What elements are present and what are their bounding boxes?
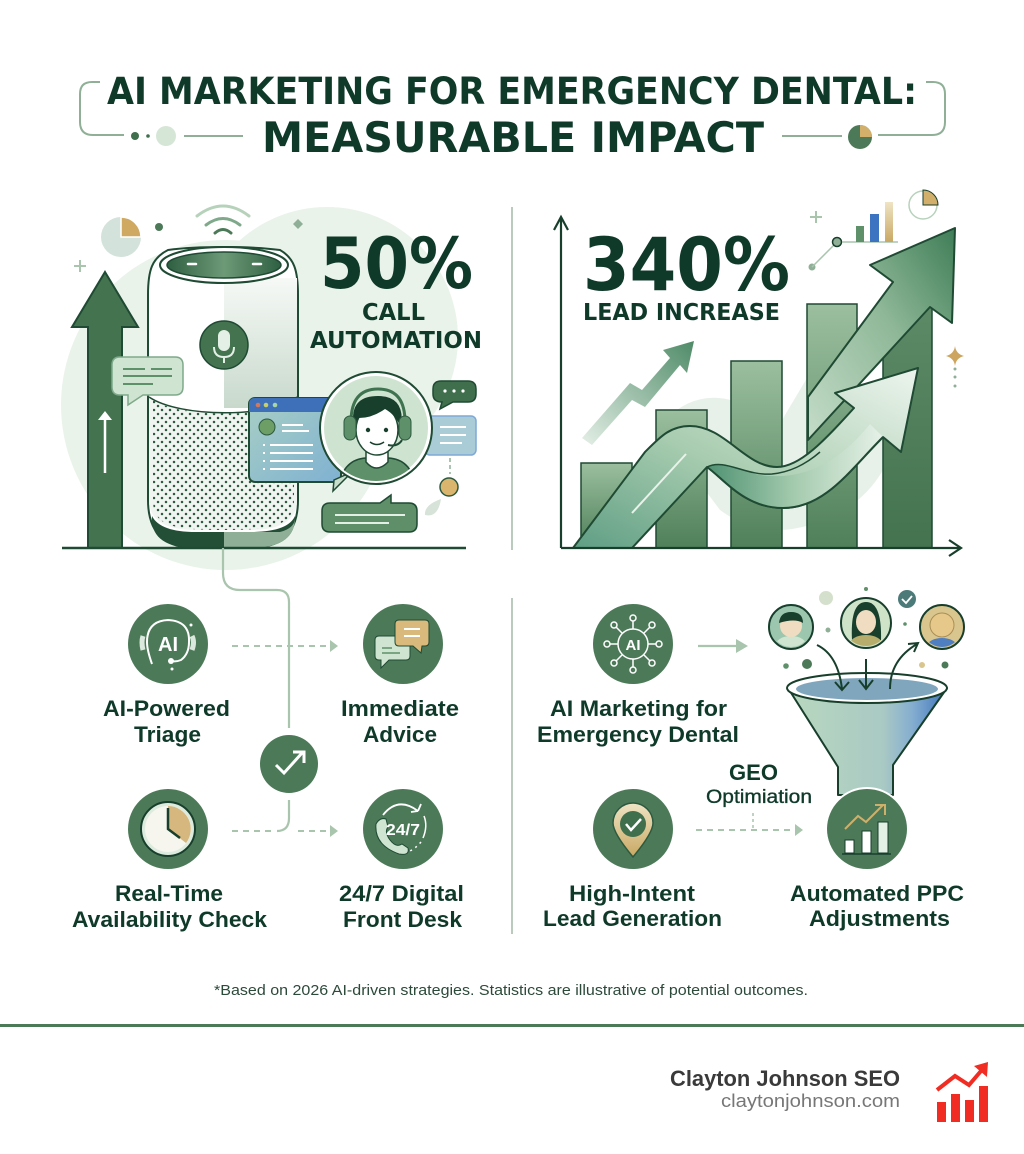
- label: Real-Time Availability Check: Real-Time: [115, 881, 223, 906]
- label: High-Intent Lead Generation: Lead Generation: [543, 906, 722, 931]
- panel: lead increase chart: [554, 190, 964, 556]
- label: AI Marketing for Emergency Dental: AI Marketing for: [550, 696, 727, 721]
- decorative plus: [810, 211, 822, 223]
- speech bubble: dark with dots: [433, 381, 476, 409]
- icon: 24/7 phone: [363, 789, 443, 869]
- vertical divider bottom: [511, 598, 513, 934]
- connector line: [223, 548, 289, 831]
- icon: clock: [128, 789, 208, 869]
- icon: red growth logo: [937, 1062, 988, 1122]
- avatar: smiling person: [920, 605, 964, 650]
- big stat: 50% call automation: AUTOMATION: [310, 328, 482, 354]
- background blob: [61, 207, 458, 570]
- vertical divider top: [511, 207, 513, 550]
- avatar: woman: [841, 598, 891, 650]
- decorative plus: [74, 260, 86, 272]
- footnote: *Based on 2026 AI-driven strategies. Statistics are illustrative of potential outcomes.: [214, 982, 808, 999]
- avatar: boy: [769, 605, 813, 650]
- agent portrait: [320, 372, 432, 491]
- sparkle and dots: [946, 346, 964, 388]
- label: GEO Optimiation: Optimiation: [706, 787, 812, 808]
- big stat: 340% lead increase: 340%: [583, 223, 790, 308]
- label: Immediate Advice: Advice: [363, 722, 437, 747]
- label: Immediate Advice: Immediate: [341, 696, 459, 721]
- dashed arrow with GEO link: [696, 813, 803, 836]
- big stat: 50% call automation: [310, 223, 482, 354]
- icon: location pin: [593, 789, 673, 869]
- footer rule: [0, 1024, 1024, 1027]
- speech bubble: green: [112, 357, 183, 405]
- decorative dots and check badge: [783, 587, 948, 669]
- curved S arrow: [573, 368, 918, 548]
- label: Immediate Advice: [341, 696, 459, 747]
- label: Automated PPC Adjustments: Adjustments: [809, 906, 950, 931]
- label: AI-Powered Triage: Triage: [134, 722, 201, 747]
- label: High-Intent Lead Generation: High-Intent: [569, 881, 696, 906]
- big stat: 50% call automation: CALL: [362, 300, 425, 326]
- arrow to funnel: [698, 639, 748, 653]
- label: Automated PPC Adjustments: Automated PPC: [790, 881, 964, 906]
- label: Real-Time Availability Check: Availability Check: [72, 907, 268, 932]
- icon: AI network: [593, 604, 673, 684]
- label: 24/7 Digital Front Desk: 24/7 Digital: [339, 881, 464, 906]
- funnel: [787, 673, 947, 795]
- label: 24/7 Digital Front Desk: Front Desk: [343, 907, 463, 932]
- icon: chat bubbles: [363, 604, 443, 684]
- footer brand text: claytonjohnson.com: [721, 1091, 900, 1111]
- big stat: 340% lead increase: LEAD INCREASE: [583, 300, 780, 326]
- panel: workflow right: [537, 587, 964, 931]
- axes: [554, 217, 961, 556]
- icon: pie chart: [101, 217, 141, 257]
- decorative dot: [155, 223, 163, 231]
- footer brand text: [670, 1066, 900, 1111]
- icon: PPC growth chart: [825, 787, 909, 871]
- panel: workflow left: [72, 604, 464, 932]
- decorative diamond: [293, 219, 303, 229]
- title: MEASURABLE IMPACT: [262, 113, 764, 162]
- gold node with dashed link: [425, 458, 458, 515]
- speech bubble: bottom green: [322, 495, 417, 532]
- title: AI MARKETING FOR EMERGENCY DENTAL:: [107, 70, 917, 113]
- label: 24/7 Digital Front Desk: [339, 881, 464, 932]
- dashed arrow: triage to advice: [232, 640, 338, 652]
- icon: wifi waves: [197, 206, 249, 233]
- pale swoosh: [665, 378, 883, 530]
- small zigzag arrow: [582, 341, 694, 445]
- title: [107, 70, 917, 162]
- label: AI Marketing for Emergency Dental: [537, 696, 739, 747]
- big stat: 50% call automation: 50%: [320, 223, 473, 305]
- funnel arrows: [817, 643, 918, 690]
- mini bar chart: [808, 202, 898, 270]
- label: Automated PPC Adjustments: [790, 881, 964, 931]
- up arrow: [72, 272, 138, 548]
- icon: AI network: AI: [626, 637, 640, 654]
- label: High-Intent Lead Generation: [543, 881, 722, 931]
- dashed arrow: availability to front desk: [232, 825, 338, 837]
- bars: [581, 304, 932, 548]
- label: GEO Optimiation: [706, 760, 812, 808]
- icon: microphone: [200, 321, 248, 369]
- label: AI Marketing for Emergency Dental: Emergency Dental: [537, 722, 739, 747]
- smart speaker: [148, 247, 298, 548]
- icon: AI headset: AI: [158, 634, 178, 656]
- label: AI-Powered Triage: AI-Powered: [103, 696, 230, 721]
- icon: check arrow badge: [260, 735, 318, 793]
- label: Real-Time Availability Check: [72, 881, 268, 932]
- icon: 24/7 phone: 24/7: [386, 822, 420, 839]
- icon: AI headset: [128, 604, 208, 684]
- big up arrow: [808, 228, 955, 440]
- title decoration: right bracket: [782, 82, 945, 149]
- label: GEO Optimiation: GEO: [729, 760, 778, 785]
- title decoration: left bracket: [80, 82, 243, 146]
- panel: call automation: [61, 206, 482, 570]
- browser window: [249, 398, 341, 482]
- footer brand text: Clayton Johnson SEO: [670, 1066, 900, 1091]
- label: AI-Powered Triage: [103, 696, 230, 747]
- icon: pie outline: [909, 190, 938, 219]
- ground line: [62, 547, 466, 549]
- blue card: [425, 416, 476, 455]
